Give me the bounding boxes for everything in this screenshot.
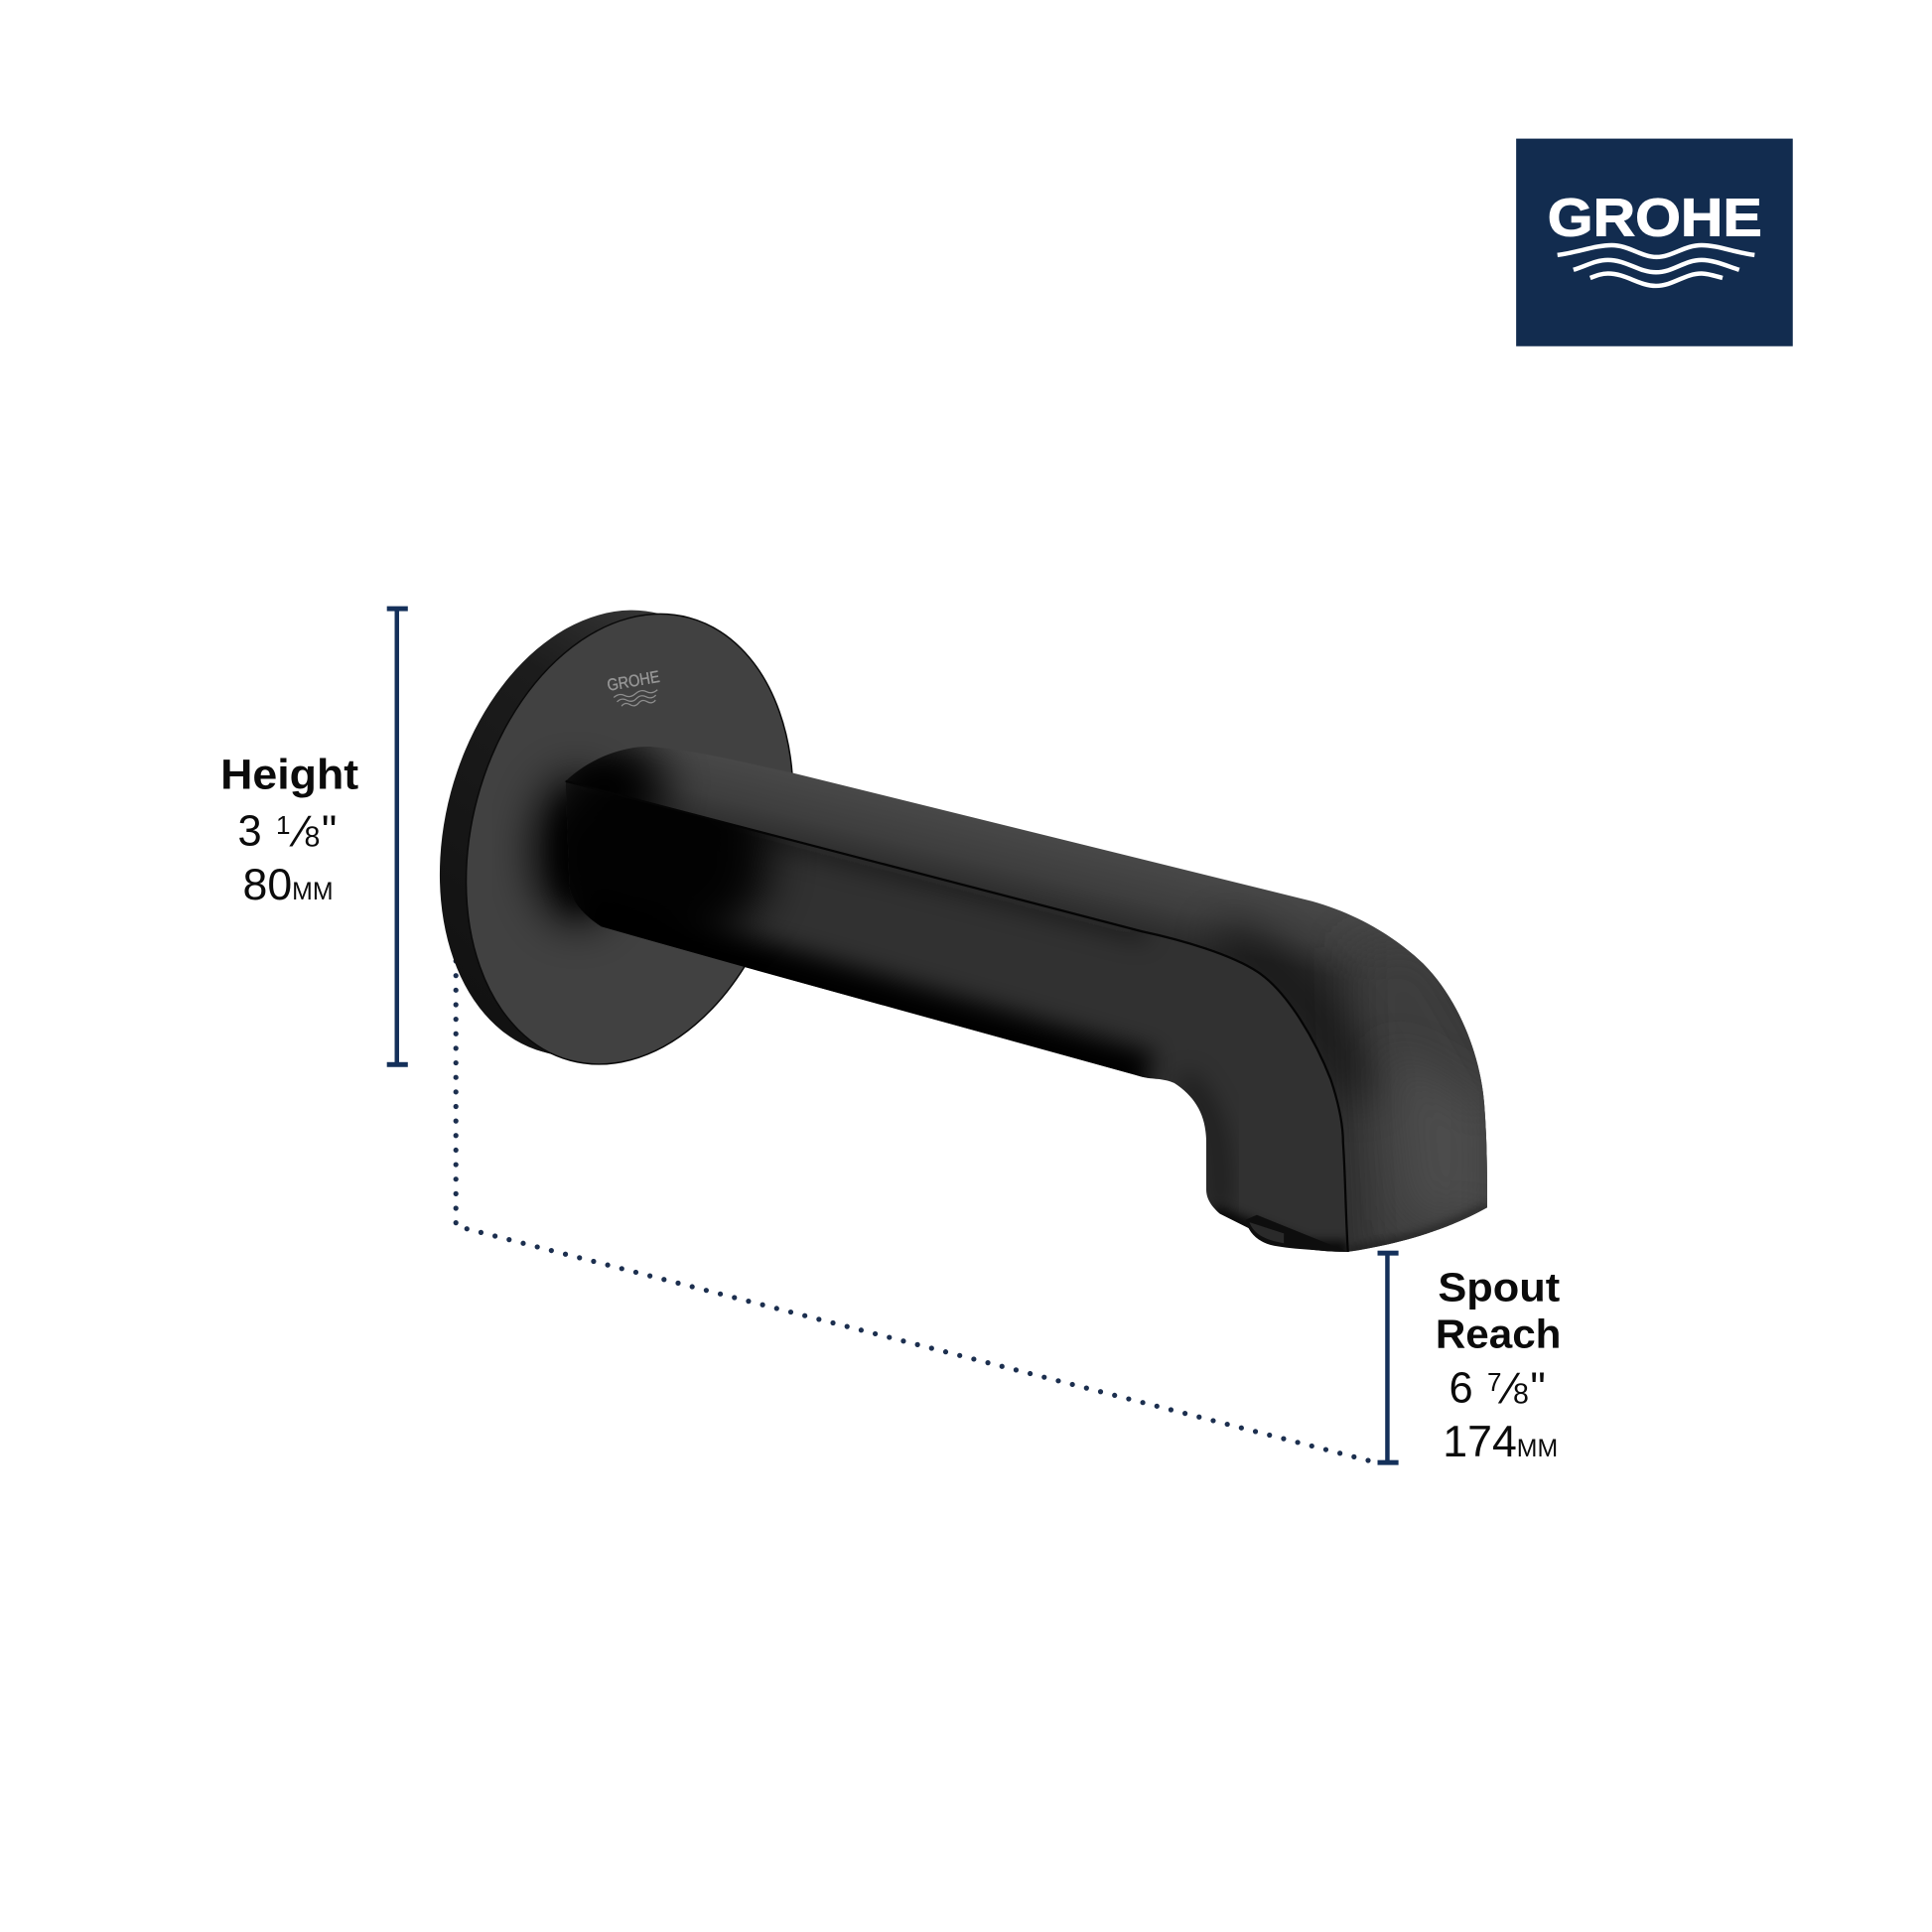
engraved plate logo bbox=[606, 667, 664, 710]
height label: " bbox=[322, 807, 337, 855]
height label: 8 bbox=[305, 822, 320, 854]
height label: 3 bbox=[238, 807, 262, 855]
engraved plate logo: GROHE bbox=[606, 667, 661, 695]
ridge line bbox=[566, 781, 1348, 1252]
height dimension bar bbox=[387, 607, 408, 1067]
height label: 80MM bbox=[242, 861, 334, 909]
spout reach label bbox=[1436, 1265, 1561, 1466]
aerator bbox=[1246, 1215, 1348, 1252]
brand logo: GROHE: GROHE bbox=[1548, 190, 1762, 248]
infographic canvas bbox=[223, 139, 1793, 1465]
height label bbox=[220, 751, 358, 909]
spout reach label: ⁄ bbox=[1497, 1365, 1521, 1414]
round wall plate bbox=[439, 610, 793, 1065]
spout top face bbox=[542, 740, 1516, 1269]
brand logo: GROHE bbox=[1516, 139, 1793, 346]
spout front face bbox=[566, 782, 1347, 1252]
spout reach label: 6 bbox=[1449, 1364, 1473, 1412]
spout reach label: 7 bbox=[1487, 1367, 1501, 1397]
spout reach label: 174MM bbox=[1443, 1418, 1558, 1466]
height label: ⁄ bbox=[288, 808, 312, 857]
faucet: wall-mount tub spout bbox=[439, 610, 1487, 1252]
spout reach label: " bbox=[1530, 1364, 1546, 1412]
height label: Height bbox=[220, 751, 358, 797]
spout reach label: Spout bbox=[1438, 1265, 1561, 1311]
dotted projection line for spout reach bbox=[456, 961, 1376, 1462]
spout reach dimension bar bbox=[1378, 1251, 1399, 1465]
spout reach label: 8 bbox=[1513, 1379, 1529, 1411]
spout reach label: Reach bbox=[1436, 1311, 1561, 1357]
height label: 1 bbox=[276, 810, 290, 840]
